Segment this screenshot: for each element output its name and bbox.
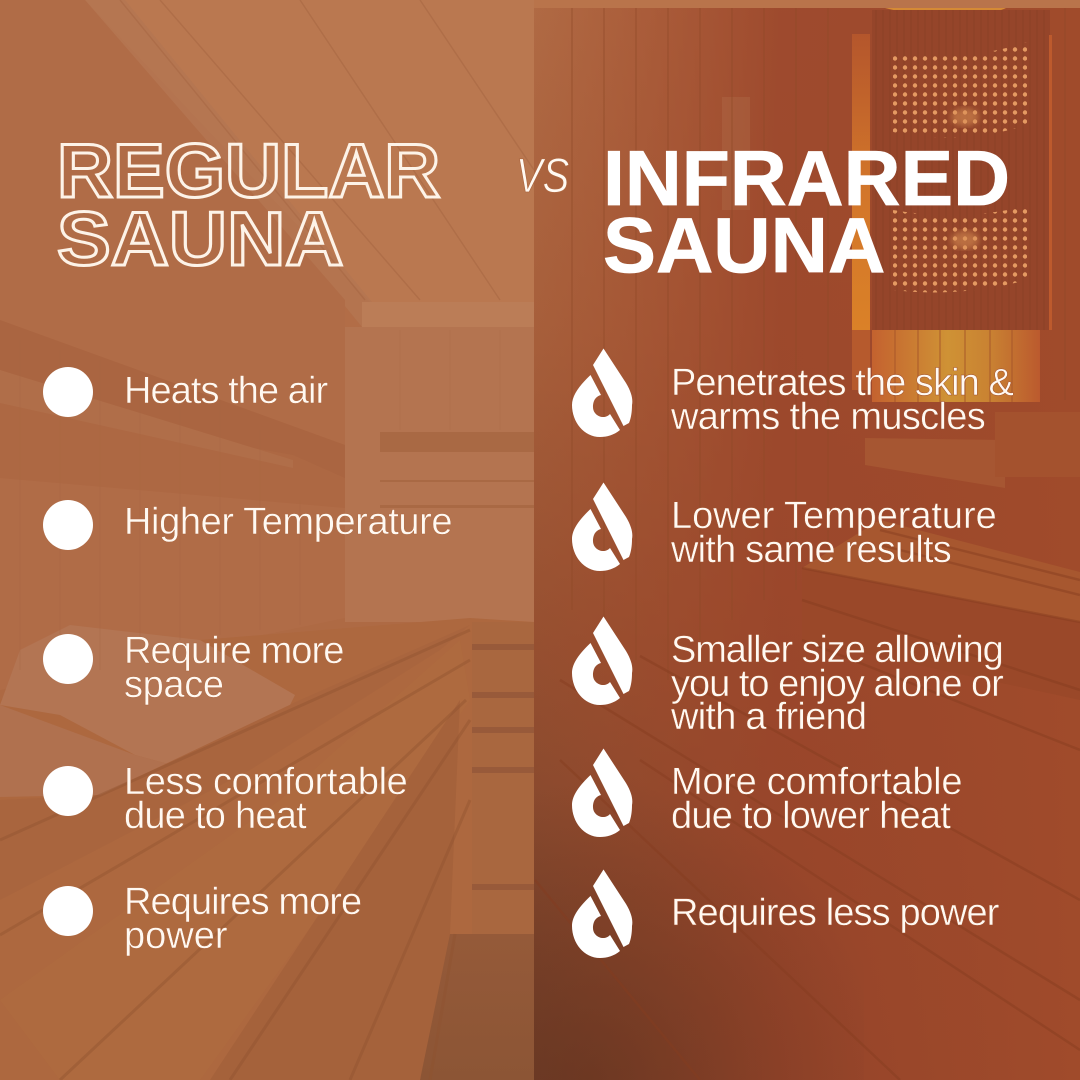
icon: drop 2	[572, 482, 632, 571]
text: smaller size: with a friend	[671, 696, 866, 738]
text: penetrates the skin	[671, 362, 1014, 438]
text: less comfortable: due to heat	[124, 794, 306, 836]
bullet 3	[43, 634, 93, 684]
text: require more space: space	[124, 664, 224, 706]
title: Infrared Sauna (solid)	[603, 134, 1010, 289]
text: require more space	[124, 630, 344, 706]
text: require more space: Require more	[124, 630, 344, 672]
text: more comfortable: More comfortable	[671, 761, 962, 803]
bullet 1	[43, 367, 93, 417]
text: penetrates the skin: warms the muscles	[671, 396, 985, 438]
text: smaller size	[671, 629, 1004, 738]
icon: drop 4	[572, 748, 632, 837]
text: higher temperature: Higher Temperature	[124, 501, 452, 543]
text: less comfortable	[124, 761, 407, 836]
vs label: VS	[516, 150, 569, 203]
icon: drop 1	[572, 348, 632, 437]
icon: drop 5	[572, 870, 632, 958]
text: heats the air: Heats the air	[124, 370, 327, 412]
text: smaller size: you to enjoy alone or	[671, 662, 1003, 704]
bullet 2	[43, 500, 93, 550]
text: smaller size: Smaller size allowing	[671, 629, 1003, 671]
bullet 4	[43, 766, 93, 816]
text: requires more power: Requires more	[124, 881, 361, 923]
text: requires more power	[124, 881, 361, 956]
text: more comfortable	[671, 761, 962, 836]
text: more comfortable: due to lower heat	[671, 794, 950, 836]
title line: Sauna: SAUNA	[603, 201, 885, 289]
text: lower temperature: with same results	[671, 528, 951, 570]
title line: Infrared: INFRARED	[603, 134, 1010, 222]
text: lower temperature: Lower Temperature	[671, 495, 997, 537]
text: lower temperature	[671, 495, 997, 570]
text: requires more power: power	[124, 914, 228, 956]
text: penetrates the skin: Penetrates the skin &	[671, 362, 1013, 404]
text: requires less power: Requires less power	[671, 892, 999, 934]
title: Regular Sauna (outlined)	[57, 142, 442, 267]
icon: drop 3	[572, 616, 632, 705]
bullet 5	[43, 886, 93, 936]
text: less comfortable: Less comfortable	[124, 761, 407, 803]
